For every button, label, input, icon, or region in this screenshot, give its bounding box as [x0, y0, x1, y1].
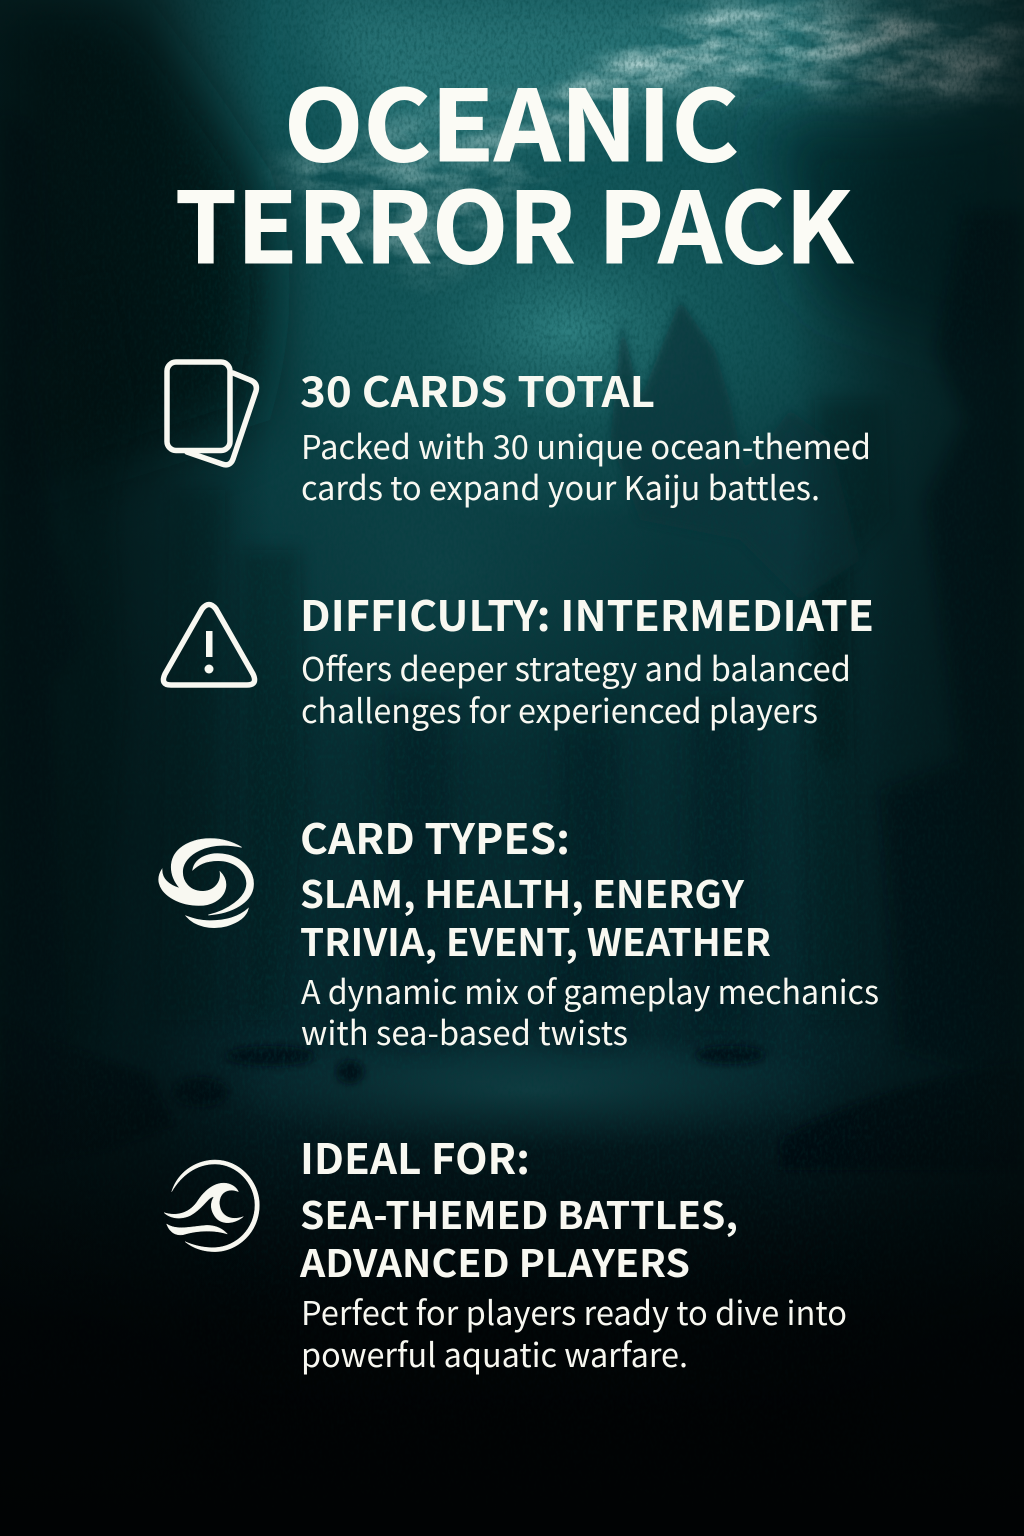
title — [175, 48, 854, 292]
text: cards description: cards to expand your Kaiju battles. — [301, 462, 820, 510]
text: difficulty description: Offers deeper strategy and balanced — [301, 643, 851, 691]
icon: wave in circle — [164, 1160, 259, 1252]
text: cards description: Packed with 30 unique ocean-themed — [301, 421, 871, 469]
text: difficulty description: challenges for experienced players — [301, 685, 818, 733]
central distant ruins — [610, 300, 860, 600]
section: difficulty — [163, 583, 874, 733]
icon: swirl — [159, 839, 254, 928]
title: TERROR PACK — [175, 150, 854, 292]
text: difficulty description — [301, 643, 851, 733]
text: card types description: with sea-based twists — [301, 1007, 628, 1055]
heading: 30 cards total: 30 CARDS TOTAL — [300, 359, 655, 420]
text: card types description: A dynamic mix of gameplay mechanics — [301, 966, 879, 1014]
title: OCEANIC — [284, 48, 739, 190]
side pillars — [0, 110, 1024, 1180]
heading: ideal for: IDEAL FOR: — [300, 1126, 530, 1187]
section: ideal for — [164, 1126, 847, 1377]
shore rocks — [0, 1020, 1024, 1170]
text: ideal for description: Perfect for players ready to dive into — [301, 1287, 847, 1335]
heading: card types: CARD TYPES: — [300, 806, 570, 867]
text: cards description — [301, 421, 871, 510]
subheading: audience list: SEA-THEMED BATTLES, — [300, 1185, 738, 1240]
subheading: card type list: SLAM, HEALTH, ENERGY — [300, 864, 745, 919]
subheading: card type list: TRIVIA, EVENT, WEATHER — [300, 912, 771, 967]
text: ideal for description — [301, 1287, 847, 1377]
dark cliff top left — [0, 0, 270, 500]
section: card types — [159, 806, 879, 1055]
section: 30 cards total — [167, 359, 871, 510]
subheading: audience list — [299, 1185, 738, 1288]
subheading: audience list: ADVANCED PLAYERS — [299, 1233, 690, 1288]
text: card types description — [301, 966, 879, 1055]
icon: cards — [167, 362, 256, 465]
heading: difficulty: DIFFICULTY: INTERMEDIATE — [300, 583, 874, 644]
dark band below right clouds — [760, 105, 1024, 360]
text: ideal for description: powerful aquatic warfare. — [301, 1329, 688, 1377]
subheading: card type list — [300, 864, 771, 967]
icon: warning triangle — [163, 604, 255, 685]
